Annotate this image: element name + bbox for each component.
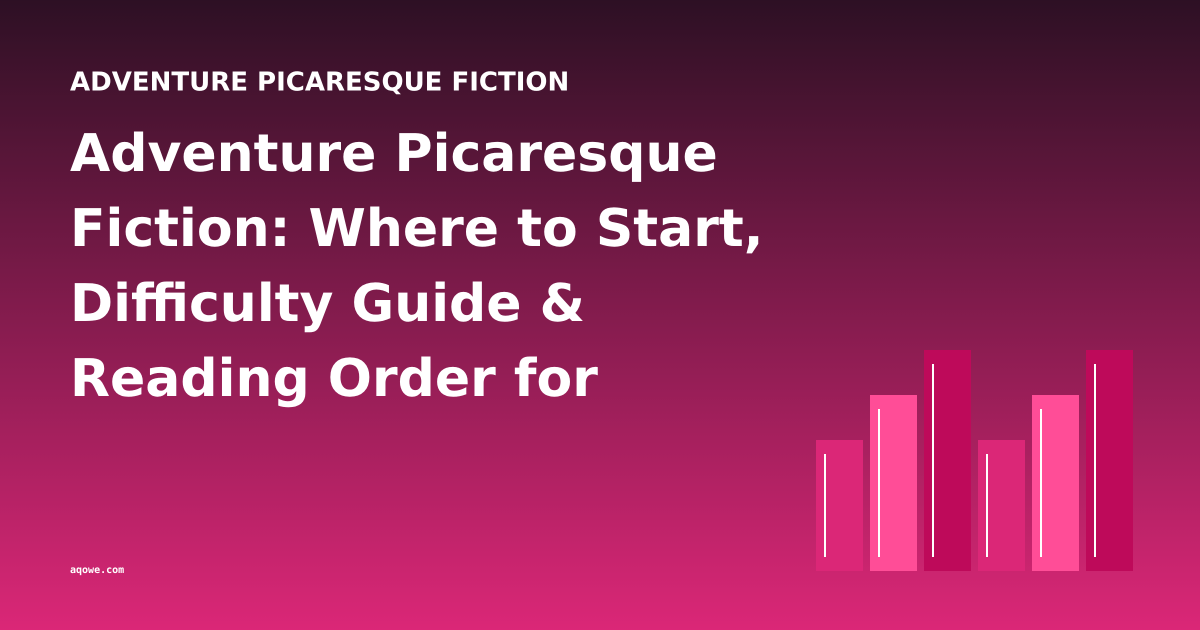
eyebrow heading: ADVENTURE PICARESQUE FICTION — [70, 68, 569, 98]
bar chart illustration — [816, 350, 1133, 571]
title: Adventure Picaresque — [70, 124, 718, 184]
title — [70, 124, 764, 409]
bar 4 — [978, 440, 1025, 571]
bar 5 — [1032, 395, 1079, 571]
title: Reading Order for — [70, 349, 598, 409]
footer domain: aqowe.com — [70, 565, 124, 576]
bar 3 — [924, 350, 971, 571]
bar 1 — [816, 440, 863, 571]
bar 2 — [870, 395, 917, 571]
bar 6 — [1086, 350, 1133, 571]
title: Difficulty Guide & — [70, 274, 585, 334]
title: Fiction: Where to Start, — [70, 199, 764, 259]
